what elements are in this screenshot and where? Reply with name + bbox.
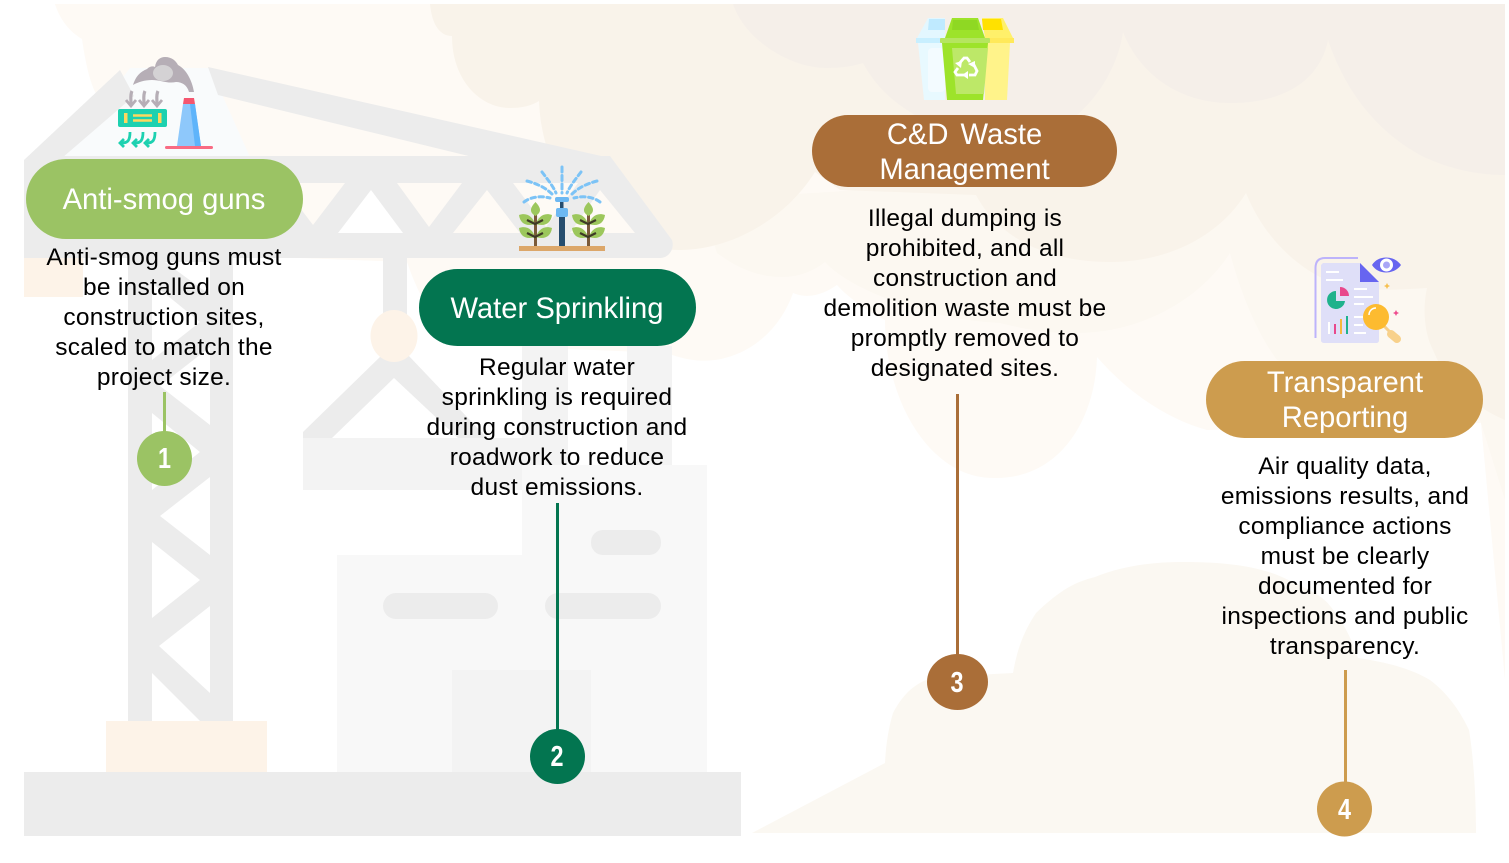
heading pill bbox=[419, 269, 696, 346]
panel: C&D waste management bbox=[812, 18, 1117, 710]
body text: must be clearly bbox=[1261, 543, 1430, 570]
body text bbox=[1221, 453, 1469, 660]
body text: Regular water bbox=[479, 354, 635, 381]
connector and number 4: 4 bbox=[1338, 794, 1351, 826]
heading pill bbox=[812, 115, 1117, 187]
heading pill: Reporting bbox=[1282, 402, 1408, 434]
body text: Air quality data, bbox=[1258, 453, 1432, 480]
body text bbox=[824, 205, 1106, 382]
connector and number 2 bbox=[530, 503, 585, 784]
body text: sprinkling is required bbox=[442, 384, 672, 411]
body text: documented for bbox=[1258, 573, 1432, 600]
connector and number 3 bbox=[927, 394, 988, 710]
heading pill: Anti-smog guns bbox=[63, 184, 265, 216]
body text: construction sites, bbox=[63, 304, 265, 331]
panel: transparent reporting bbox=[1206, 258, 1483, 836]
icon: sprinkler and plants bbox=[519, 167, 605, 251]
body text bbox=[427, 354, 687, 501]
building bbox=[337, 346, 707, 772]
heading pill bbox=[1206, 361, 1483, 438]
crane bbox=[62, 68, 250, 157]
body text: inspections and public bbox=[1221, 603, 1469, 630]
body text: prohibited, and all bbox=[866, 235, 1064, 262]
icon: recycling bins bbox=[916, 18, 1014, 100]
body text: be installed on bbox=[83, 274, 245, 301]
panel: water sprinkling bbox=[419, 167, 696, 784]
icon: report with eye and magnifier bbox=[1316, 258, 1401, 343]
connector and number 1 bbox=[137, 392, 192, 486]
body text: dust emissions. bbox=[471, 474, 643, 501]
icon: smog gun bbox=[118, 57, 213, 149]
body text: during construction and bbox=[427, 414, 687, 441]
body text: Anti-smog guns must bbox=[46, 244, 282, 271]
body text: project size. bbox=[97, 364, 231, 391]
body text: compliance actions bbox=[1238, 513, 1452, 540]
body text: Illegal dumping is bbox=[868, 205, 1062, 232]
connector and number 2: 2 bbox=[550, 741, 564, 773]
body text: demolition waste must be bbox=[824, 295, 1106, 322]
body text: designated sites. bbox=[871, 355, 1059, 382]
panel: anti-smog guns bbox=[26, 57, 303, 486]
body text: scaled to match the bbox=[55, 334, 273, 361]
body text bbox=[46, 244, 282, 391]
connector and number 4 bbox=[1317, 670, 1372, 836]
heading pill: Management bbox=[879, 154, 1050, 186]
heading pill: Water Sprinkling bbox=[450, 293, 664, 325]
body text: promptly removed to bbox=[851, 325, 1079, 352]
heading pill: Transparent bbox=[1267, 367, 1423, 399]
heading pill: C&D Waste bbox=[887, 119, 1042, 151]
heading pill bbox=[26, 159, 303, 239]
body text: emissions results, and bbox=[1221, 483, 1469, 510]
connector and number 3: 3 bbox=[950, 667, 964, 699]
body text: construction and bbox=[873, 265, 1057, 292]
body text: transparency. bbox=[1270, 633, 1420, 660]
connector and number 1: 1 bbox=[158, 443, 171, 475]
body text: roadwork to reduce bbox=[450, 444, 664, 471]
